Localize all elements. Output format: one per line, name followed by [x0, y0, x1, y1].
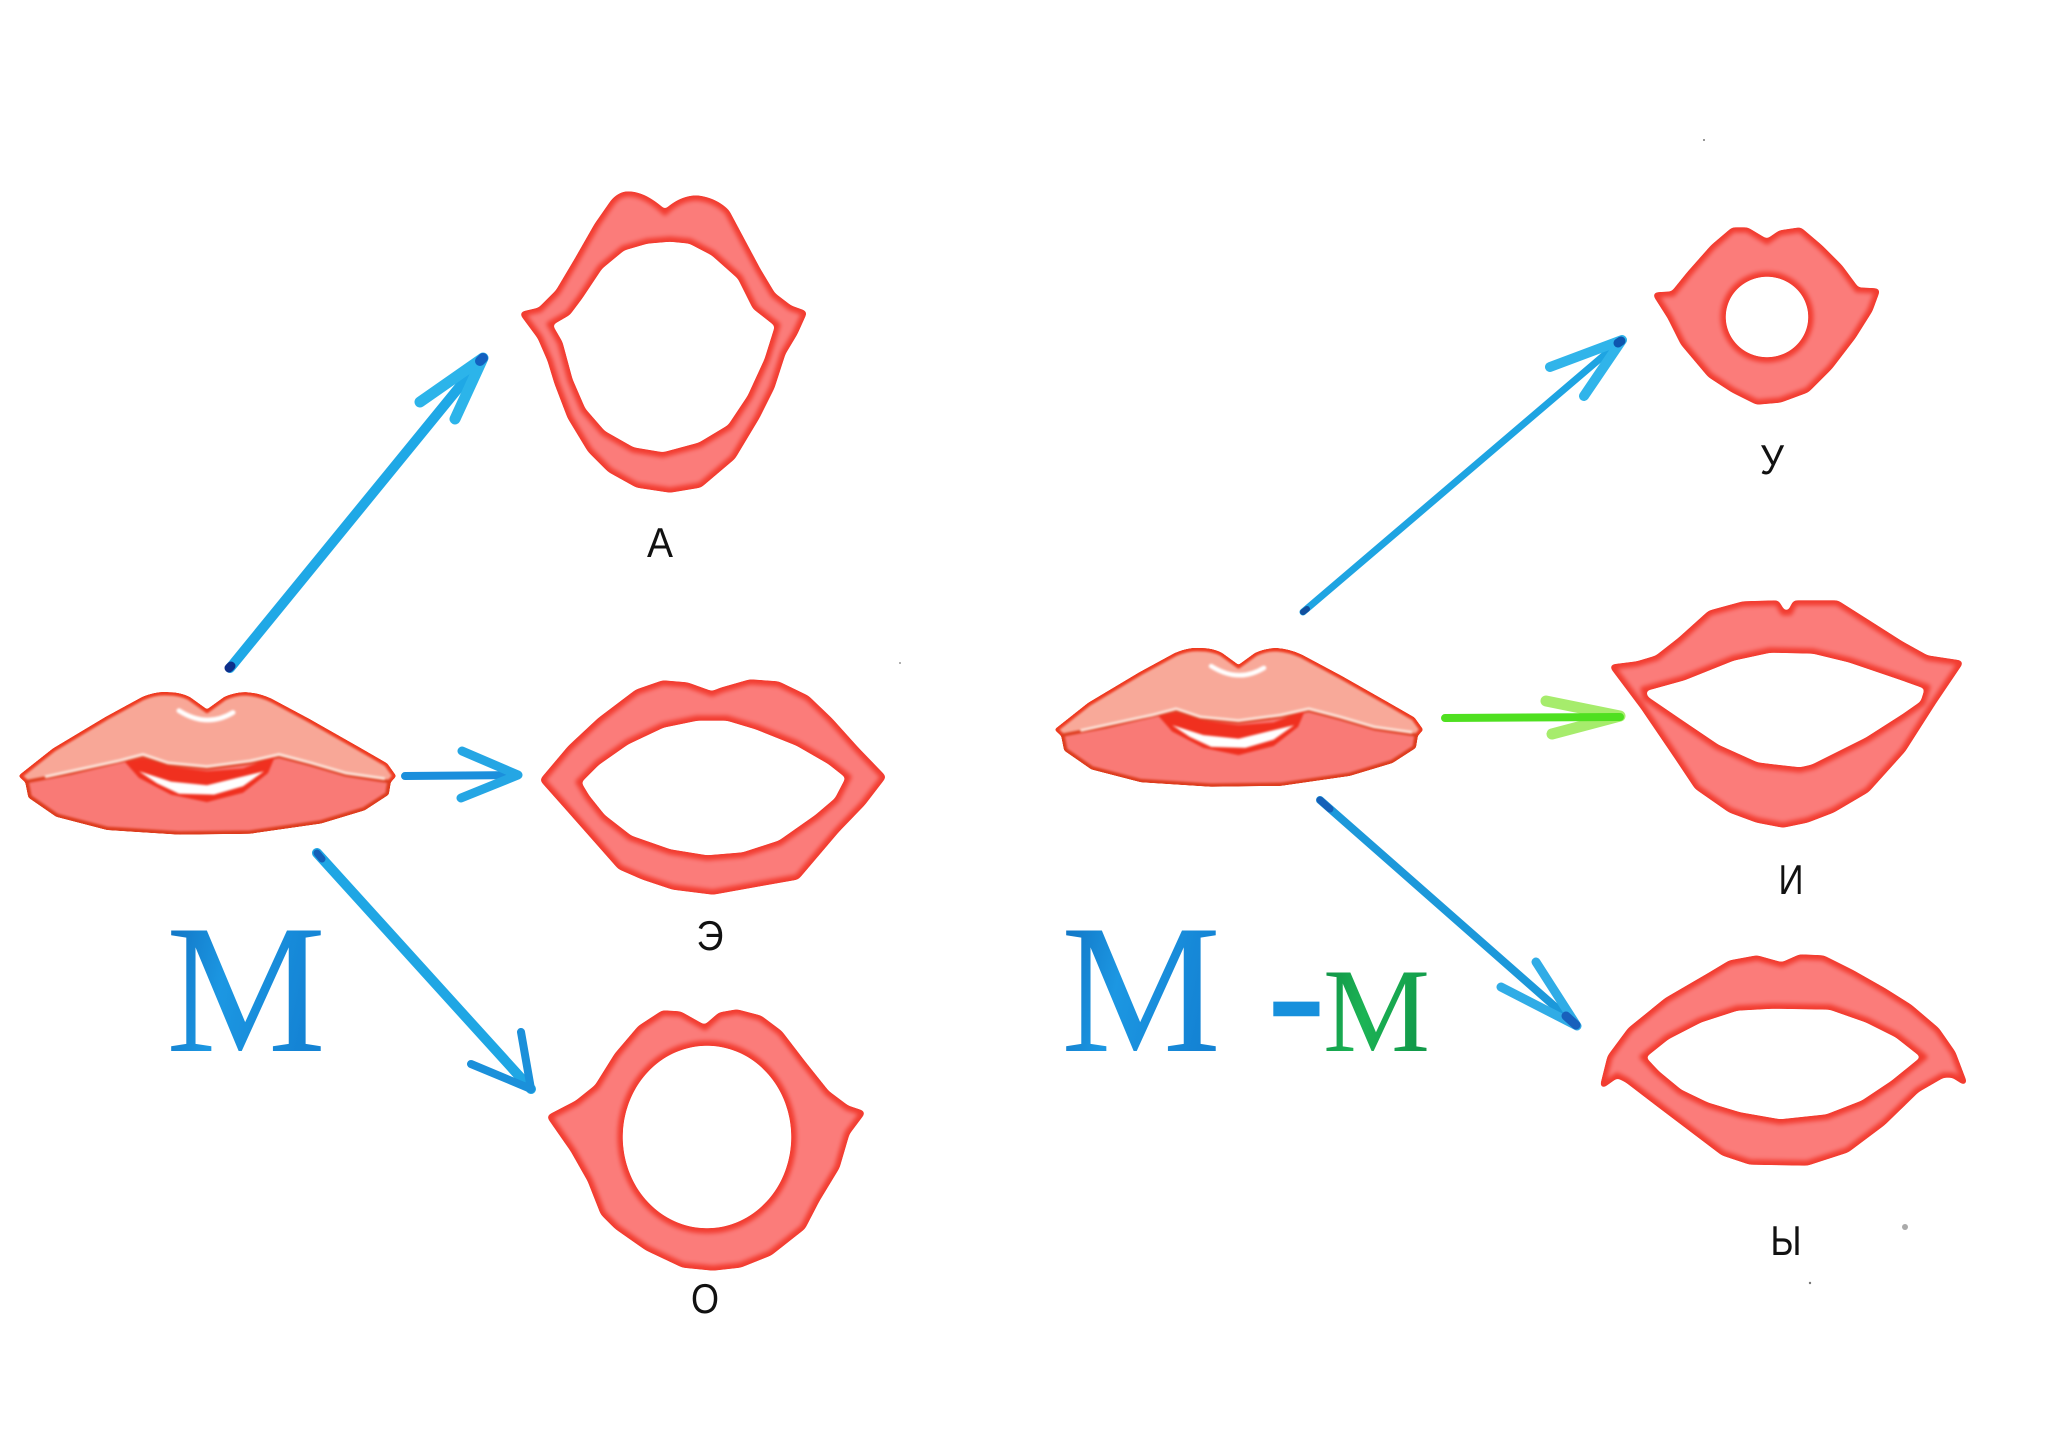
right closed lips (sound M-soft) [1057, 650, 1421, 785]
arrow to U [1303, 340, 1622, 612]
lips shape: sound Y [1603, 957, 1964, 1163]
label: letters M - m, right: М [1061, 887, 1221, 1091]
label: letters M - m, right: М [1323, 944, 1430, 1077]
arrow to E [405, 751, 518, 798]
lips shape: sound E [543, 682, 883, 892]
lips shape: sound U [1656, 230, 1877, 402]
arrow to A [229, 358, 483, 668]
label: I: И [1778, 856, 1804, 903]
label: large letter M, left: М [166, 887, 326, 1091]
lips shape: sound A [523, 194, 804, 490]
arrow to Y [1320, 800, 1577, 1026]
label: letters M - m, right [1061, 887, 1430, 1091]
label: E: Э [696, 912, 724, 959]
lips shape: sound I [1613, 603, 1960, 825]
arrow to I (green) [1445, 701, 1620, 734]
lips shape: sound O [550, 1012, 862, 1268]
label: U: У [1760, 436, 1784, 483]
label: letters M - m, right: - [1268, 898, 1325, 1086]
label: O: О [691, 1275, 719, 1322]
label: A: А [647, 519, 673, 566]
arrow to O [317, 853, 531, 1089]
left closed lips (sound M) [21, 694, 394, 833]
label: Y: Ы [1770, 1217, 1802, 1264]
